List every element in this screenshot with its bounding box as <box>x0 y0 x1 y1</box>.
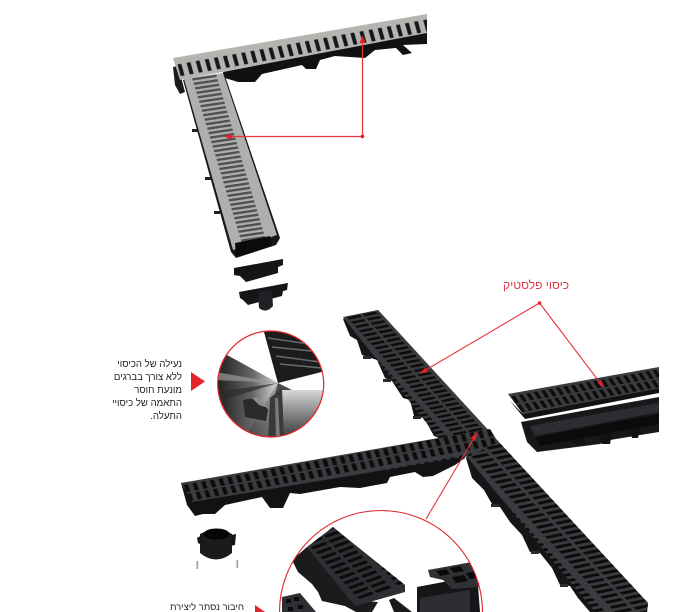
text: cover lock <box>112 358 182 422</box>
black channel: diagonal grate upper <box>343 310 492 440</box>
end face <box>235 236 272 257</box>
open channel separate piece <box>521 397 659 452</box>
left gradient wedge <box>218 355 278 432</box>
zoom grate <box>307 527 405 606</box>
red callout: gray grates <box>224 35 366 140</box>
plastic grate separate piece <box>508 367 659 419</box>
screws <box>196 561 198 569</box>
channel side and end <box>183 73 280 258</box>
gray horizontal drainage channel <box>173 14 427 94</box>
grate <box>181 429 498 502</box>
text: hidden connection: חיבור נסתר ליצירת <box>170 601 244 612</box>
text: cover lock: התעלה. <box>150 410 182 422</box>
black channel: body of diagonal run <box>343 310 648 612</box>
channel body under zoom grate <box>292 547 378 612</box>
black channel: horizontal run <box>181 429 498 516</box>
gray grate <box>173 14 427 80</box>
white upper wedge <box>226 332 278 383</box>
black channel: diagonal grate lower <box>462 440 648 612</box>
bright center <box>278 372 324 390</box>
block <box>243 397 268 421</box>
detail circle: hidden connection <box>280 510 482 612</box>
text: cover lock: נעילה של הכיסוי <box>117 358 182 370</box>
red callout: hidden connection <box>426 432 477 519</box>
outlet connector ring <box>196 528 238 569</box>
detail circle: cover lock <box>215 328 330 440</box>
arrow marker: cover lock <box>191 372 205 391</box>
red callout: plastic cover <box>419 301 604 388</box>
channel body <box>223 32 427 82</box>
gray grate <box>184 73 277 250</box>
end cap <box>173 66 185 94</box>
text: cover lock: התאמה של כיסויי <box>112 397 182 409</box>
left piece <box>282 593 316 612</box>
outlet fitting with pipe <box>239 283 288 311</box>
right piece <box>417 580 480 612</box>
text: cover lock: מונעת חוסר <box>134 385 182 396</box>
red label: כיסוי פלסטיק <box>503 278 569 292</box>
channel body <box>181 440 465 516</box>
gray vertical drainage channel <box>183 73 280 258</box>
dark ribs <box>264 332 322 383</box>
text: cover lock: ללא צורך בברגים <box>114 371 182 383</box>
arrow marker: hidden connection <box>255 605 265 612</box>
lower centre channel <box>389 598 412 612</box>
end cap fitting <box>234 259 283 282</box>
